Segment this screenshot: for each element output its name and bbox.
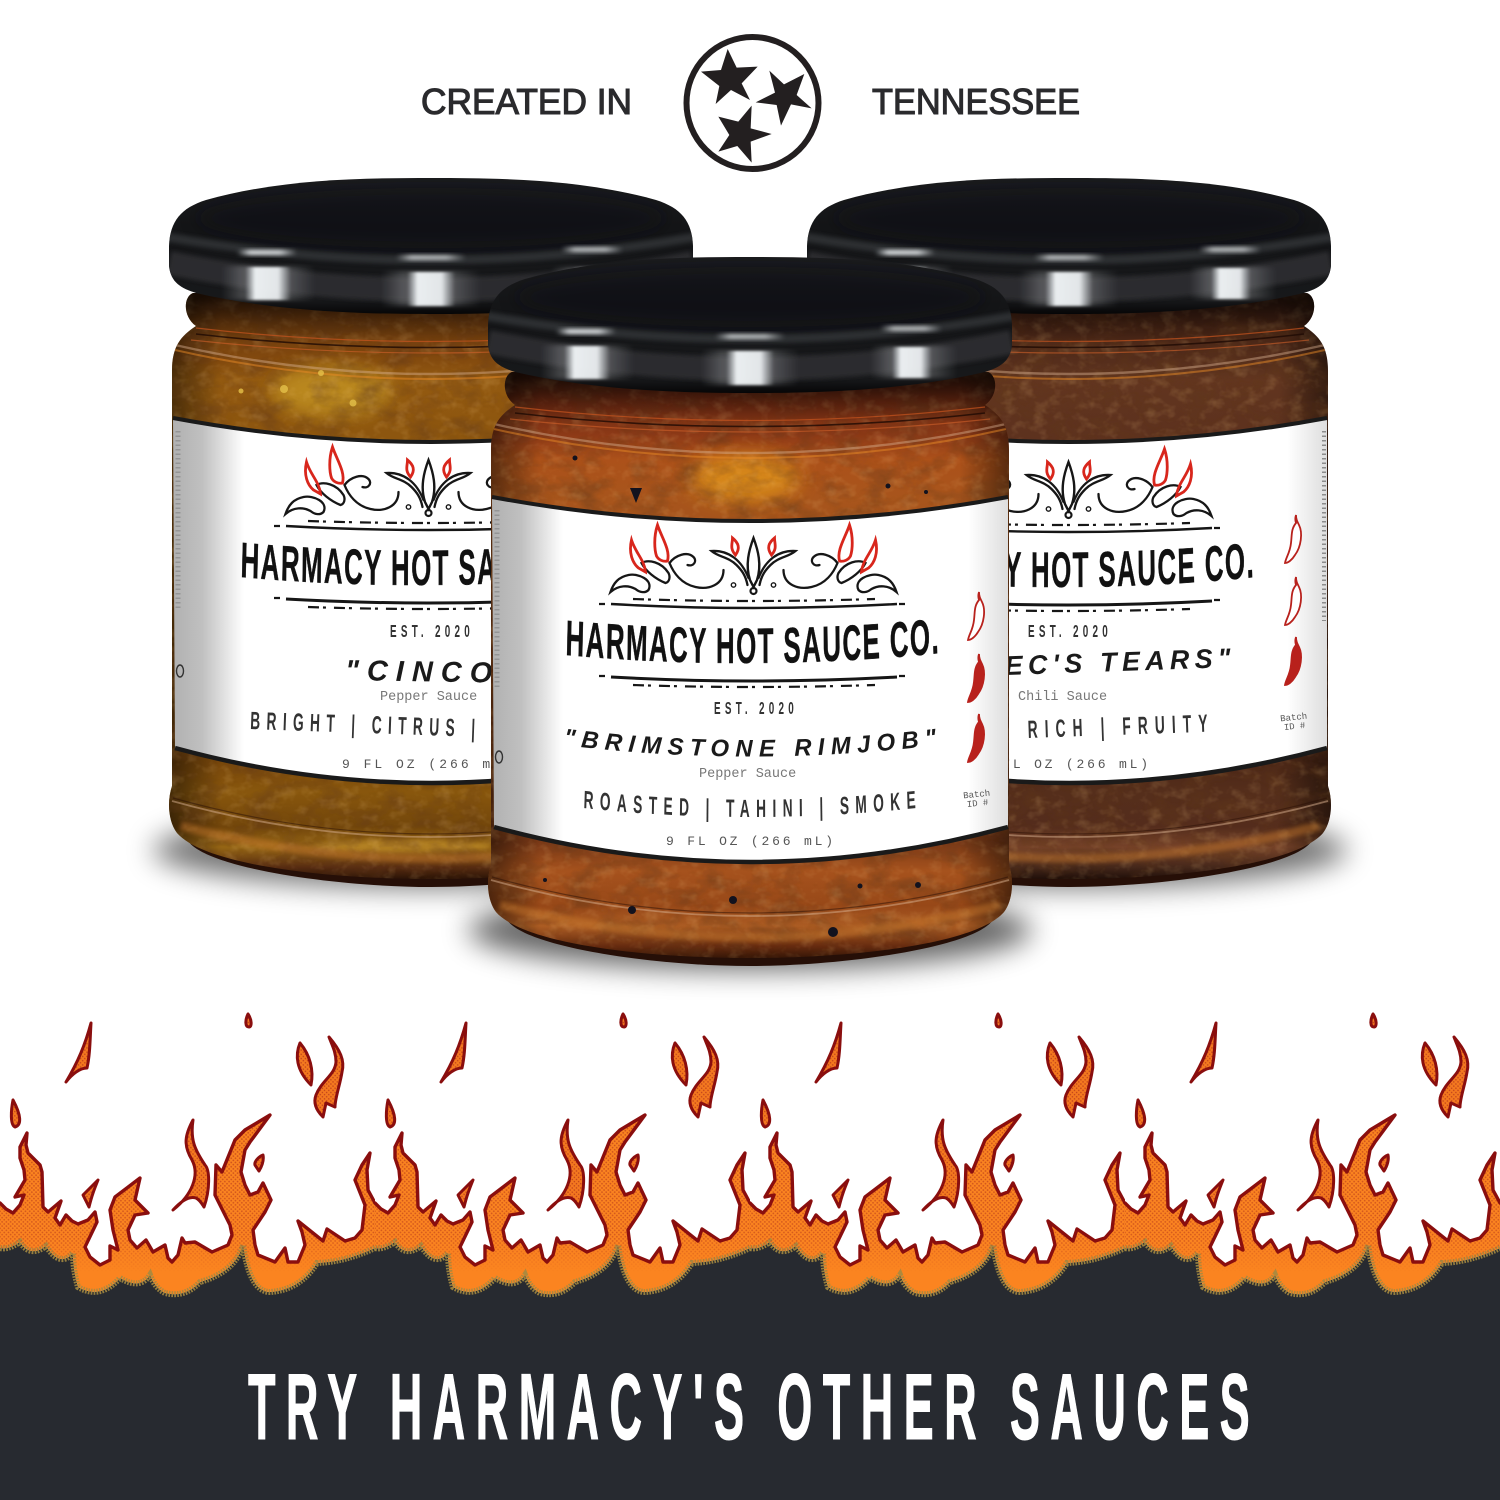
dark bottom band	[0, 1238, 1500, 1500]
heading: Tennessee: TENNESSEE	[872, 81, 1080, 122]
ornament	[610, 525, 896, 594]
jar: Tears chili sauce (right)	[807, 178, 1360, 908]
established: EST. 2020	[714, 699, 794, 719]
heading: created in: CREATED IN	[421, 81, 632, 122]
batch id: Batch	[1280, 712, 1308, 724]
label text: Cinco: HARMACY HOT SAUCE CO.	[242, 542, 491, 586]
lid	[486, 257, 1014, 393]
jar: Cinco pepper sauce (left): "CINCO	[345, 655, 501, 690]
call to action: TRY HARMACY'S OTHER SAUCES	[248, 1354, 1250, 1459]
label text: Tears	[1009, 444, 1252, 612]
sauce type: Pepper Sauce	[699, 767, 796, 782]
jar: Cinco pepper sauce (left): 9 FL OZ (266 mL)	[342, 757, 515, 772]
sauce name: "BRIMSTONE RIMJOB"	[566, 728, 936, 756]
batch id: ID #	[1283, 721, 1307, 733]
jar: Cinco pepper sauce (left): EST. 2020	[390, 622, 470, 642]
jar: Brimstone pepper sauce (center)	[454, 257, 1046, 991]
icon: heat peppers	[968, 592, 984, 762]
brand name: HARMACY HOT SAUCE CO.	[566, 620, 938, 664]
specks	[543, 456, 928, 937]
label panel	[492, 497, 1008, 862]
label text: Tears: HARMACY HOT SAUCE CO.	[1009, 544, 1252, 588]
icon: heat peppers	[1285, 515, 1301, 685]
jar: Tears chili sauce (right): EST. 2020	[1028, 622, 1108, 642]
jar: Tears chili sauce (right): EC'S TEARS"	[1004, 643, 1232, 681]
icon: Tennessee tri-star	[686, 37, 818, 169]
jar: Tears chili sauce (right): RICH | FRUITY	[1027, 711, 1208, 744]
jar: Cinco pepper sauce (left): Pepper Sauce	[380, 690, 477, 705]
label text: Cinco	[242, 442, 491, 610]
jar: Tears chili sauce (right): 9 FL OZ (266 mL)	[981, 757, 1148, 772]
batch id: Batch	[963, 789, 991, 801]
jar: Cinco pepper sauce (left)	[140, 178, 693, 908]
volume: 9 FL OZ (266 mL)	[666, 834, 833, 849]
jar: Tears chili sauce (right): Chili Sauce	[1018, 690, 1107, 705]
flame border	[0, 1000, 1500, 1294]
flavor notes: ROASTED | TAHINI | SMOKE	[584, 790, 916, 822]
batch id: ID #	[966, 798, 990, 810]
jar: Cinco pepper sauce (left): BRIGHT | CITRUS |	[250, 708, 476, 743]
